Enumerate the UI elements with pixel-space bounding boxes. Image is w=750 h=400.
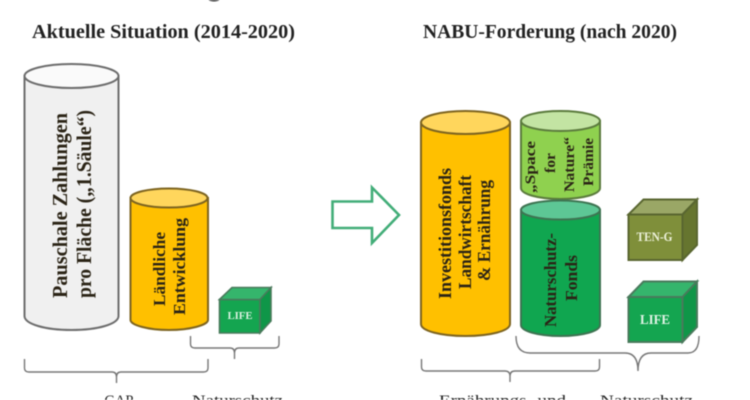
cube: TEN-G: [628, 200, 697, 260]
cylinder: Space for Nature premium: for: [543, 153, 559, 173]
cube: LIFE small: LIFE: [228, 311, 252, 322]
cylinder: nature conservation fund: [521, 200, 600, 336]
cylinder: Space for Nature premium: Prämie: [581, 138, 597, 186]
panel: NABU demand: [421, 22, 699, 400]
cylinder: nature conservation fund: Naturschutz-: [541, 233, 560, 327]
cylinder: investment fund: [421, 111, 510, 336]
brace: nature conservation right: [516, 336, 699, 371]
cylinder: investment fund: & Ernährung: [474, 180, 494, 281]
cylinder: Space for Nature premium: „Space: [523, 141, 539, 193]
cylinder: investment fund: Landwirtschaft: [455, 175, 475, 289]
cylinder: investment fund: Investitionsfonds: [435, 168, 455, 299]
heading: NABU demand: NABU-Forderung (nach 2020): [423, 22, 677, 43]
cylinder: rural development: Ländliche: [150, 232, 169, 306]
brace: food and agriculture: [422, 359, 600, 382]
cylinder: flat-rate payments: Pauschale Zahlungen: [48, 113, 72, 298]
cube: LIFE large: [628, 282, 697, 342]
brace: nature conservation: [190, 336, 279, 359]
cylinder: nature conservation fund: Fonds: [562, 255, 581, 301]
cylinder: Space for Nature premium: [521, 111, 600, 199]
arrow: [332, 188, 399, 243]
cube: LIFE large: LIFE: [640, 313, 670, 328]
cylinder: flat-rate payments: [24, 64, 118, 330]
cube: LIFE small: [220, 288, 271, 333]
panel: current situation: [24, 22, 295, 400]
cylinder: rural development: Entwicklung: [170, 217, 189, 315]
cylinder: Space for Nature premium: Nature“: [562, 136, 578, 192]
cylinder: rural development: [130, 188, 208, 330]
cylinder: flat-rate payments: pro Fläche („1.Säule“): [72, 110, 96, 298]
heading: current situation: Aktuelle Situation (2014-2020): [32, 22, 295, 43]
cube: TEN-G: TEN-G: [636, 229, 672, 244]
brace: CAP: [24, 359, 208, 383]
